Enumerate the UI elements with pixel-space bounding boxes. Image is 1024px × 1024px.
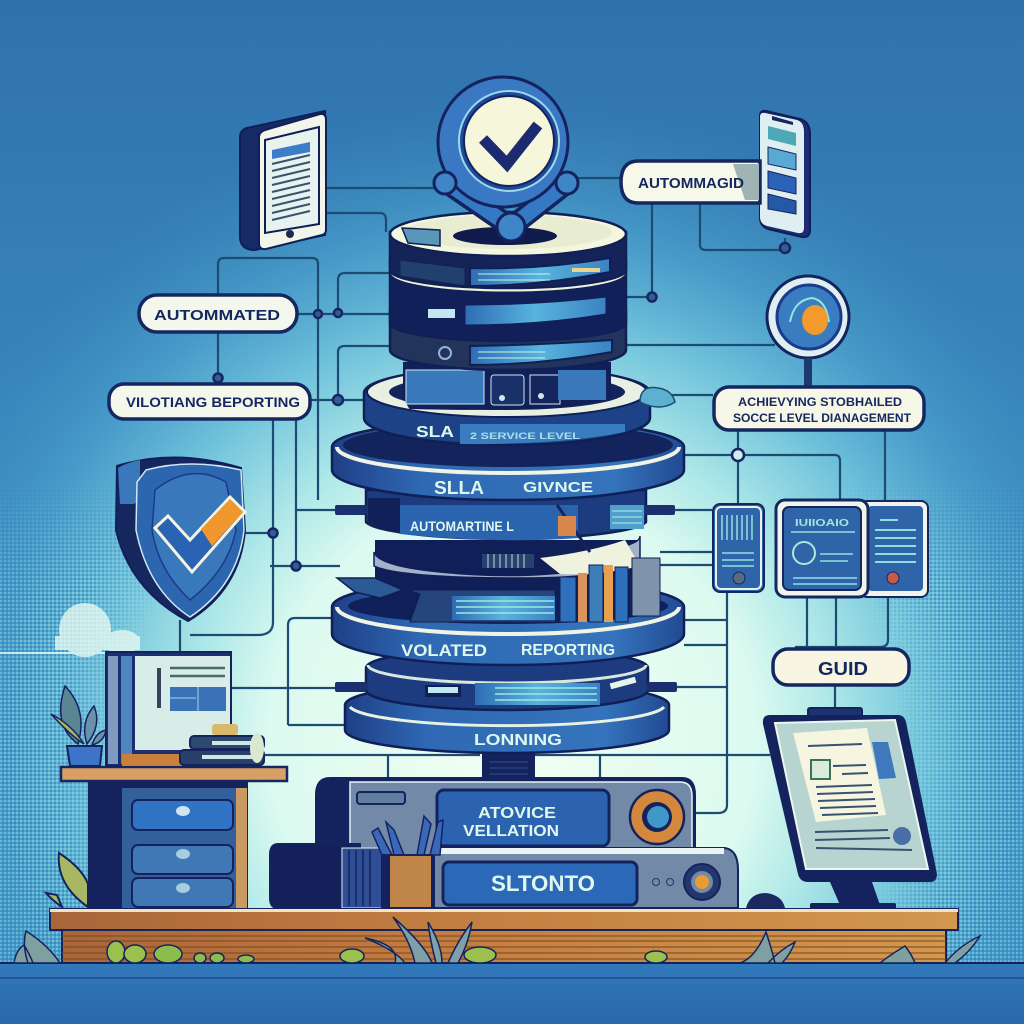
- cards group: [713, 500, 928, 597]
- tier 3: [390, 310, 626, 370]
- label: achieving service level management: ACHIEVYING STOBHAILED: [738, 397, 902, 409]
- cloud: [0, 603, 140, 657]
- connector stubs middle: [335, 505, 675, 515]
- tier: module screens: [404, 363, 610, 409]
- tier: sla governance disk: [332, 420, 684, 500]
- connector lines: [180, 178, 888, 813]
- lower device: validation: ATOVICE: [478, 805, 556, 822]
- label: automated left: [139, 295, 297, 332]
- label: automated top right: AUTOMMAGID: [638, 176, 744, 192]
- label: violating reporting: VILOTIANG BEPORTING: [126, 394, 300, 410]
- icon: protection shield: [116, 457, 245, 621]
- tall leaf: [46, 853, 88, 907]
- pencil cup: [372, 816, 443, 908]
- tier 2: [390, 260, 626, 341]
- tier: violated reporting disk: VOLATED: [401, 641, 487, 660]
- right card: [860, 501, 928, 597]
- tier: automating disk: [366, 490, 646, 552]
- phone card: [713, 504, 764, 592]
- cabinet: [88, 782, 248, 909]
- tier: logging disk: [345, 682, 669, 753]
- wooden desk: [50, 909, 958, 963]
- tier 1 top disk: [390, 212, 626, 288]
- icon: smartphone: [760, 111, 810, 237]
- tier: violated reporting disk: REPORTING: [521, 642, 615, 659]
- tier: logging disk: LONNING: [474, 732, 562, 749]
- potted plant: [51, 686, 106, 766]
- badge ring: [438, 77, 568, 207]
- computer monitor with report: [746, 708, 937, 909]
- background: [0, 149, 1024, 962]
- grass and shrubs: [14, 917, 980, 963]
- front card: [776, 500, 868, 597]
- check: [483, 125, 538, 164]
- books: [560, 558, 660, 622]
- label: guid: [773, 649, 909, 685]
- label: achieving service level management: SOCCE LEVEL DIANAGEMENT: [733, 413, 911, 425]
- label: guid: GUID: [818, 659, 868, 679]
- icon: tablet document: [240, 111, 326, 250]
- lower device: validation: VELLATION: [463, 823, 559, 840]
- front card: IUIIOAIO: [795, 518, 849, 529]
- lower device: storage: [270, 844, 738, 908]
- icon: gauge: [767, 276, 849, 386]
- stack stem: [482, 752, 535, 779]
- tier: disk body with vent and books: [337, 536, 660, 622]
- tier: sla label disk: 2 SERVICE LEVEL: [470, 431, 581, 441]
- shelf board: [61, 767, 287, 781]
- connector stubs lower: [335, 682, 677, 692]
- tier: sla label disk: [364, 367, 650, 445]
- label: automated top right: [621, 161, 760, 203]
- label: violating reporting: [109, 384, 310, 419]
- desk unit with cabinet: [46, 652, 287, 909]
- monitor with binders: [106, 652, 231, 766]
- tier: module: [366, 648, 648, 710]
- tier: sla governance disk: SLLA: [434, 478, 484, 498]
- lower device: validation: [316, 778, 695, 880]
- joints: [434, 172, 456, 194]
- label: automated left: AUTOMMATED: [154, 308, 280, 324]
- tier: automating disk: AUTOMARTINE L: [410, 518, 514, 534]
- tier: sla governance disk: GIVNCE: [523, 479, 593, 496]
- checkmark badge: [434, 77, 578, 241]
- floor band: [0, 962, 1024, 1024]
- label: achieving service level management: [714, 387, 924, 430]
- tier: sla label disk: SLA: [416, 424, 455, 441]
- connector nodes: [214, 243, 790, 570]
- lower device: storage: SLTONTO: [491, 871, 595, 896]
- badge arm: [447, 183, 567, 227]
- tier: violated reporting disk: [332, 579, 684, 665]
- stacked books: [180, 724, 264, 765]
- small cloud connector: [640, 388, 675, 407]
